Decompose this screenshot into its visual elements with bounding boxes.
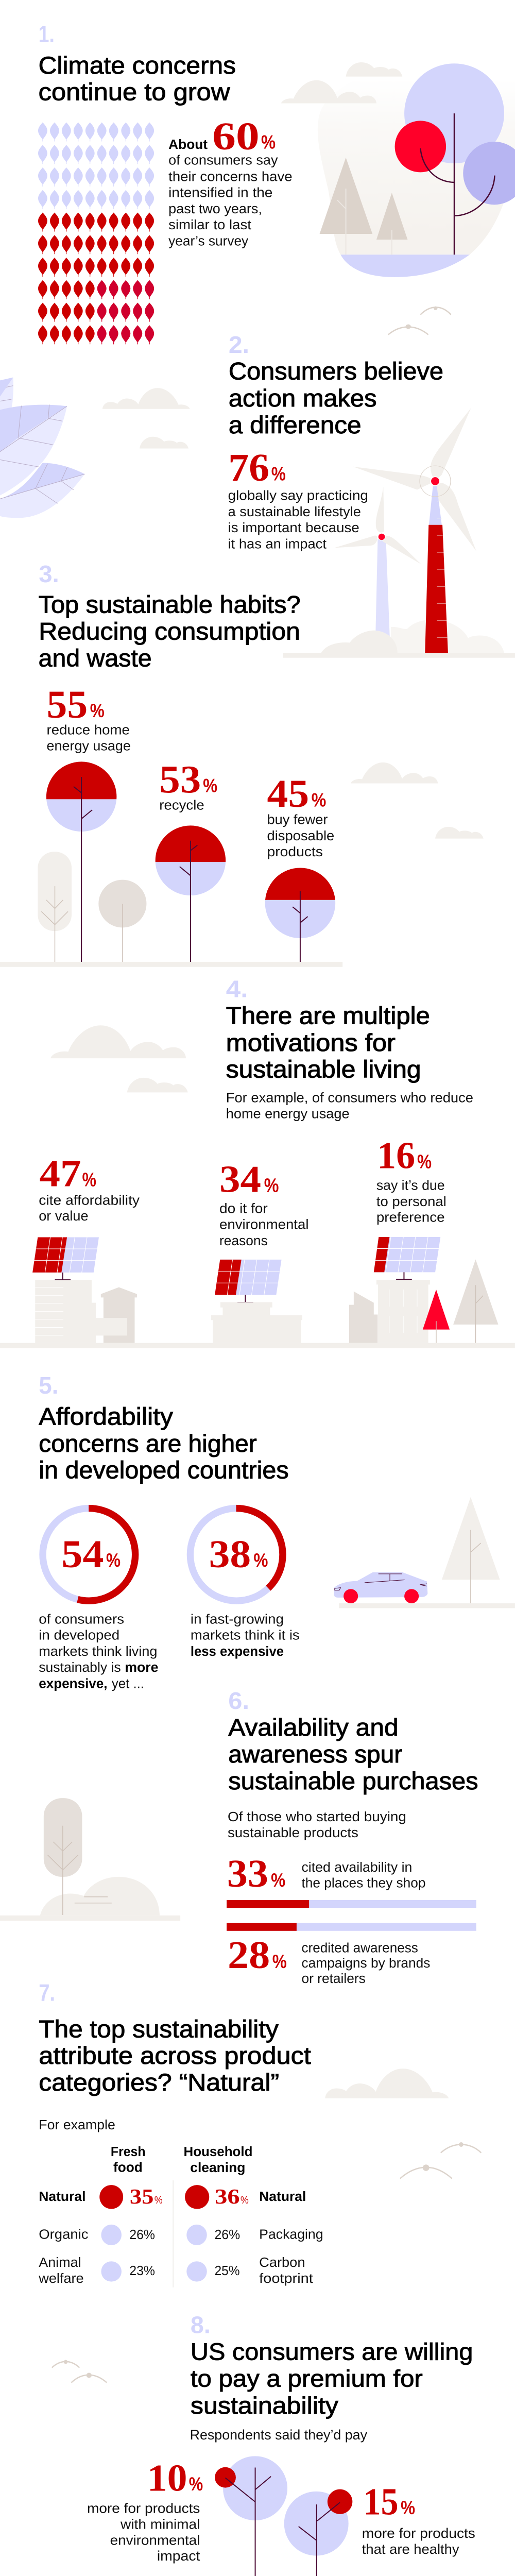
icon: solar panel 47% on building — [32, 1238, 137, 1343]
stat 33%: 33 — [227, 1852, 268, 1895]
table: household cleaning column: Natural — [259, 2189, 306, 2204]
description fast-growing markets: in fast-growing — [191, 1612, 284, 1626]
stat 34%: 34 — [219, 1158, 261, 1200]
stat 47%: 47 — [40, 1153, 81, 1195]
leaf pictogram 60 of 100 — [38, 123, 154, 344]
heading: Consumers believe — [229, 358, 443, 385]
section number 7: 7. — [39, 1980, 55, 2006]
stat 55% reduce home energy usage — [47, 683, 131, 753]
description developed markets: expensive, — [39, 1676, 108, 1691]
heading: attribute across product — [39, 2043, 311, 2070]
heading: Climate concerns — [39, 52, 236, 79]
heading — [229, 358, 443, 439]
description developed markets: markets think living — [39, 1643, 157, 1659]
table: household cleaning column: footprint — [259, 2270, 313, 2285]
stat 15%: 15 — [363, 2481, 399, 2523]
heading — [228, 1715, 478, 1794]
heading: and waste — [39, 645, 152, 672]
heading: sustainability — [191, 2392, 338, 2419]
illustration: forest scene — [281, 55, 515, 277]
stat 34%: do it for — [219, 1201, 268, 1216]
stat 16%: preference — [376, 1210, 445, 1225]
clouds — [351, 762, 484, 839]
description fast-growing markets: less expensive — [191, 1643, 284, 1659]
stat description: globally say practicing — [228, 488, 368, 503]
stat 33%: % — [271, 1869, 285, 1891]
table: fresh food column: food — [113, 2160, 143, 2175]
section number 3: 3. — [39, 561, 59, 587]
donut value 38%: % — [253, 1549, 268, 1571]
icon: solar panel 16% on building — [349, 1237, 440, 1343]
stat 53% recycle: 53 — [159, 758, 201, 801]
stat 10%: 10 — [147, 2457, 187, 2499]
stat description: intensified in the — [168, 185, 272, 200]
stat 10% — [87, 2457, 203, 2564]
heading: There are multiple — [226, 1003, 430, 1029]
trees — [423, 1259, 498, 1343]
stat 15% — [362, 2481, 475, 2557]
stat 55% reduce home energy usage: 55 — [47, 683, 88, 726]
heading: The top sustainability — [39, 2016, 279, 2043]
table: fresh food column: 26% — [129, 2227, 155, 2242]
heading — [226, 1003, 430, 1083]
illustration: leaves left — [0, 378, 85, 518]
heading: action makes — [229, 385, 377, 412]
stat 10%: environmental — [110, 2533, 200, 2548]
table: fresh food column: 23% — [129, 2263, 155, 2278]
stat 10%: with minimal — [120, 2517, 200, 2532]
stat description: is important because — [228, 520, 359, 535]
stat 10%: impact — [157, 2548, 200, 2564]
stat 33%: the places they shop — [301, 1875, 426, 1890]
stat 55% reduce home energy usage: energy usage — [47, 738, 131, 753]
panel: section 3 top sustainable habits — [0, 561, 484, 967]
stat 55% reduce home energy usage: reduce home — [47, 722, 130, 737]
description developed markets: in developed — [39, 1628, 119, 1642]
description developed markets: sustainably is — [39, 1660, 121, 1675]
section number 5: 5. — [39, 1372, 59, 1399]
subheading — [226, 1090, 473, 1122]
stat 45% buy fewer disposable products: % — [312, 789, 326, 811]
stat 34%: environmental — [219, 1217, 308, 1232]
stat 60%: % — [261, 131, 276, 153]
table: household cleaning column: cleaning — [190, 2160, 245, 2175]
table: fresh food column: 35 — [130, 2184, 153, 2208]
stat 16%: say it’s due — [376, 1178, 445, 1193]
table: fresh food column: welfare — [38, 2270, 84, 2285]
subheading: Respondents said they’d pay — [190, 2427, 368, 2443]
ground — [0, 962, 342, 967]
table: household cleaning column — [184, 2144, 323, 2285]
donut value 38%: 38 — [209, 1533, 251, 1576]
stat 53% recycle: recycle — [159, 798, 204, 812]
stat description: of consumers say — [168, 152, 278, 167]
section number 4: 4. — [226, 976, 248, 1003]
illustration: tree and hills — [0, 1798, 180, 1921]
stat 76%: % — [271, 463, 286, 485]
subheading: Of those who started buying — [228, 1809, 406, 1824]
description developed markets: yet ... — [112, 1676, 144, 1691]
tree: 45% — [265, 868, 335, 962]
donut chart 54% — [43, 1509, 135, 1601]
panel: section 2 action makes a difference — [0, 332, 515, 658]
tree: 15% — [284, 2489, 352, 2576]
section number 6: 6. — [228, 1688, 249, 1715]
stat 45% buy fewer disposable products: 45 — [267, 772, 309, 816]
stat 45% buy fewer disposable products — [267, 772, 334, 859]
heading: motivations for — [226, 1029, 396, 1056]
table: fresh food column: % — [154, 2194, 163, 2206]
heading: sustainable living — [226, 1056, 421, 1083]
stat 47% — [39, 1153, 140, 1224]
heading: a difference — [229, 412, 362, 439]
tree: 53% — [156, 825, 226, 962]
heading — [39, 1403, 289, 1484]
tree: 10% — [215, 2456, 287, 2576]
stat 33%: cited availability in — [301, 1860, 412, 1875]
table: fresh food column: Animal — [39, 2255, 81, 2270]
donut chart 38% — [190, 1509, 283, 1601]
stat 15%: % — [401, 2497, 415, 2518]
donut value 54%: % — [106, 1549, 121, 1571]
illustration: car and tree — [334, 1497, 515, 1608]
stat 16% — [376, 1134, 447, 1225]
table: fresh food column: Organic — [39, 2227, 89, 2242]
heading: in developed countries — [39, 1457, 289, 1484]
stat description: their concerns have — [168, 169, 293, 184]
stat 28%: campaigns by brands — [301, 1956, 430, 1971]
heading — [191, 2338, 473, 2419]
stat 34%: % — [264, 1175, 279, 1196]
subheading: sustainable products — [228, 1825, 358, 1840]
table: household cleaning column: % — [241, 2194, 249, 2206]
stat 34% — [219, 1158, 308, 1248]
stat 60% — [168, 115, 276, 158]
heading: Affordability — [39, 1403, 173, 1430]
bar 28% — [227, 1923, 476, 1931]
stat description: it has an impact — [228, 536, 327, 551]
stat 33% — [227, 1852, 426, 1895]
cloud — [325, 2069, 449, 2098]
panel: section 1 climate concerns — [38, 22, 515, 344]
description developed markets: more — [125, 1660, 158, 1675]
stat description — [228, 488, 368, 551]
stat 28% — [228, 1934, 430, 1986]
heading — [39, 2016, 311, 2096]
stat 34%: reasons — [219, 1233, 268, 1248]
table: household cleaning column: 25% — [214, 2263, 240, 2278]
stat description: past two years, — [168, 201, 262, 216]
stat description: similar to last — [168, 217, 251, 232]
description developed markets — [39, 1612, 158, 1691]
table: fresh food column: Fresh — [111, 2144, 146, 2159]
stat 28%: or retailers — [301, 1971, 366, 1986]
subheading: home energy usage — [226, 1106, 350, 1122]
stat description — [168, 152, 293, 248]
heading — [39, 591, 301, 672]
stat 47%: % — [82, 1169, 96, 1191]
birds — [400, 2142, 481, 2179]
birds — [52, 2360, 107, 2383]
illustration: wind turbines — [283, 408, 515, 658]
stat 28%: 28 — [228, 1934, 270, 1977]
stat 16%: to personal — [376, 1194, 447, 1209]
stat 28%: credited awareness — [301, 1940, 418, 1955]
heading: concerns are higher — [39, 1430, 257, 1457]
stat 45% buy fewer disposable products: buy fewer — [267, 812, 328, 827]
panel: section 7 top sustainability attribute — [38, 1980, 481, 2287]
section number 2: 2. — [229, 332, 249, 358]
subheading: For example — [39, 2117, 115, 2132]
icon: birds — [388, 307, 451, 335]
tree: 55% — [46, 761, 116, 962]
panel: section 6 availability and awareness — [0, 1688, 478, 1986]
stat 16%: 16 — [377, 1134, 415, 1177]
stat 45% buy fewer disposable products: disposable — [267, 828, 334, 843]
illustration: clouds — [102, 388, 190, 449]
heading — [39, 52, 236, 106]
heading: Reducing consumption — [39, 618, 300, 645]
stat 60%: 60 — [212, 115, 260, 158]
panel: section 4 motivations — [0, 976, 515, 1348]
icon: solar panel 34% on building — [211, 1260, 302, 1343]
stat 53% recycle: % — [203, 774, 217, 796]
heading: continue to grow — [39, 79, 230, 106]
heading: awareness spur — [228, 1741, 402, 1768]
background trees — [38, 852, 146, 962]
panel: section 8 willing to pay premium — [52, 2312, 515, 2576]
table: household cleaning column: Carbon — [259, 2255, 305, 2270]
stat description: year’s survey — [168, 233, 249, 248]
clouds — [50, 1025, 188, 1092]
section number 8: 8. — [191, 2312, 211, 2338]
ground — [0, 1343, 515, 1348]
stat 28%: % — [272, 1951, 287, 1972]
heading: Availability and — [228, 1715, 399, 1741]
stat 55% reduce home energy usage: % — [90, 700, 105, 721]
subheading — [228, 1809, 406, 1840]
stat 10%: more for products — [87, 2501, 200, 2516]
table: household cleaning column: Packaging — [259, 2227, 323, 2242]
bar 33% — [227, 1900, 476, 1908]
stat 47%: or value — [39, 1209, 89, 1224]
table: fresh food column: Natural — [39, 2189, 85, 2204]
description fast-growing markets — [191, 1612, 300, 1659]
stat 45% buy fewer disposable products: products — [267, 844, 323, 859]
panel: section 5 affordability — [39, 1372, 515, 1691]
stat 15%: that are healthy — [362, 2541, 459, 2557]
table: household cleaning column: Household — [184, 2144, 252, 2159]
heading: Top sustainable habits? — [39, 591, 301, 618]
stat 60%: About — [168, 137, 208, 152]
heading: categories? “Natural” — [39, 2070, 279, 2096]
description developed markets: of consumers — [39, 1612, 124, 1626]
stat 47%: cite affordability — [39, 1193, 140, 1208]
table: fresh food column — [38, 2144, 163, 2285]
stat 76%: 76 — [228, 446, 269, 489]
stat description: a sustainable lifestyle — [228, 504, 361, 519]
stat 16%: % — [417, 1151, 432, 1173]
section number 1: 1. — [39, 22, 55, 48]
table: household cleaning column: 26% — [214, 2227, 240, 2242]
description fast-growing markets: markets think it is — [191, 1628, 300, 1642]
donut value 54%: 54 — [61, 1533, 104, 1576]
panel: section 8 willing to pay premium: % — [189, 2473, 203, 2495]
table: household cleaning column: 36 — [215, 2184, 240, 2208]
